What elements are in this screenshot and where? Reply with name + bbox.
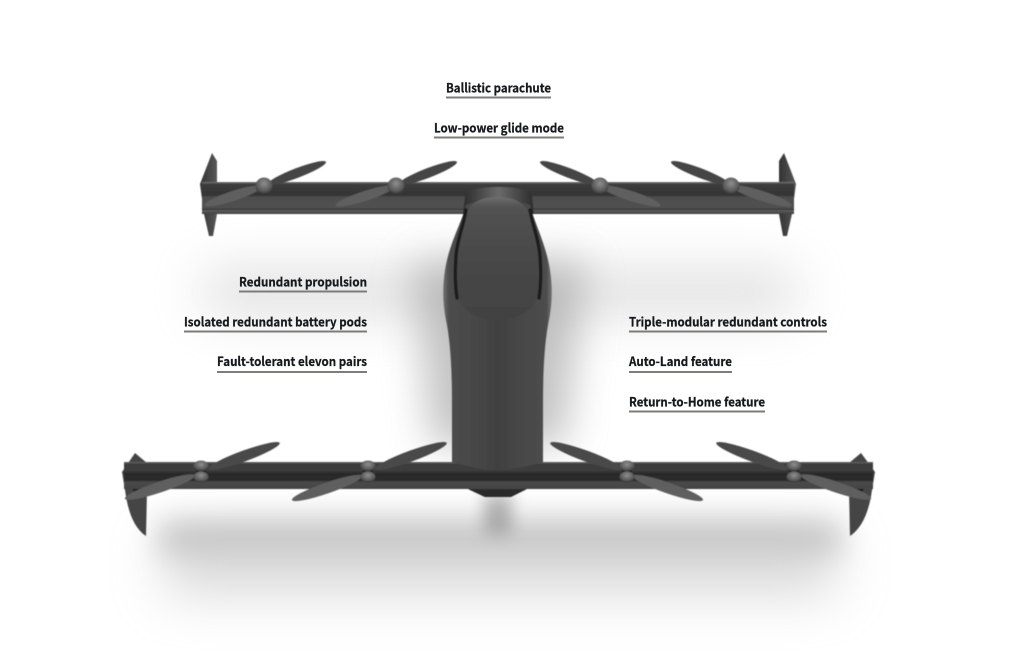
rotor group: front wing left — [123, 438, 449, 505]
label: Fault-tolerant elevon pairs: Fault-tolerant elevon pairs — [217, 351, 367, 370]
canopy — [458, 197, 538, 320]
nose underside — [468, 489, 527, 497]
fuselage — [443, 200, 552, 497]
label: Low-power glide mode: Low-power glide mode — [434, 118, 564, 136]
rear wing fins — [200, 153, 796, 236]
rotor group: rear wing right — [538, 157, 793, 210]
fuselage neck — [463, 187, 534, 214]
label: Triple-modular redundant controls: Triple-modular redundant controls — [629, 312, 827, 330]
label: Isolated redundant battery pods: Isolated redundant battery pods — [184, 312, 367, 330]
label: Redundant propulsion: Redundant propulsion — [239, 272, 367, 290]
label: Ballistic parachute: Ballistic parachute — [446, 78, 551, 96]
front wing fins — [122, 453, 875, 536]
label: Return-to-Home feature: Return-to-Home feature — [629, 392, 765, 410]
aircraft — [122, 153, 875, 536]
label: Auto-Land feature: Auto-Land feature — [628, 351, 732, 370]
front wing — [124, 462, 873, 489]
background shadow — [160, 262, 840, 593]
cockpit slots — [455, 210, 541, 298]
rotor group: rear wing left — [203, 157, 459, 210]
rear wing — [202, 182, 794, 214]
rotor group: front wing right — [548, 438, 873, 505]
